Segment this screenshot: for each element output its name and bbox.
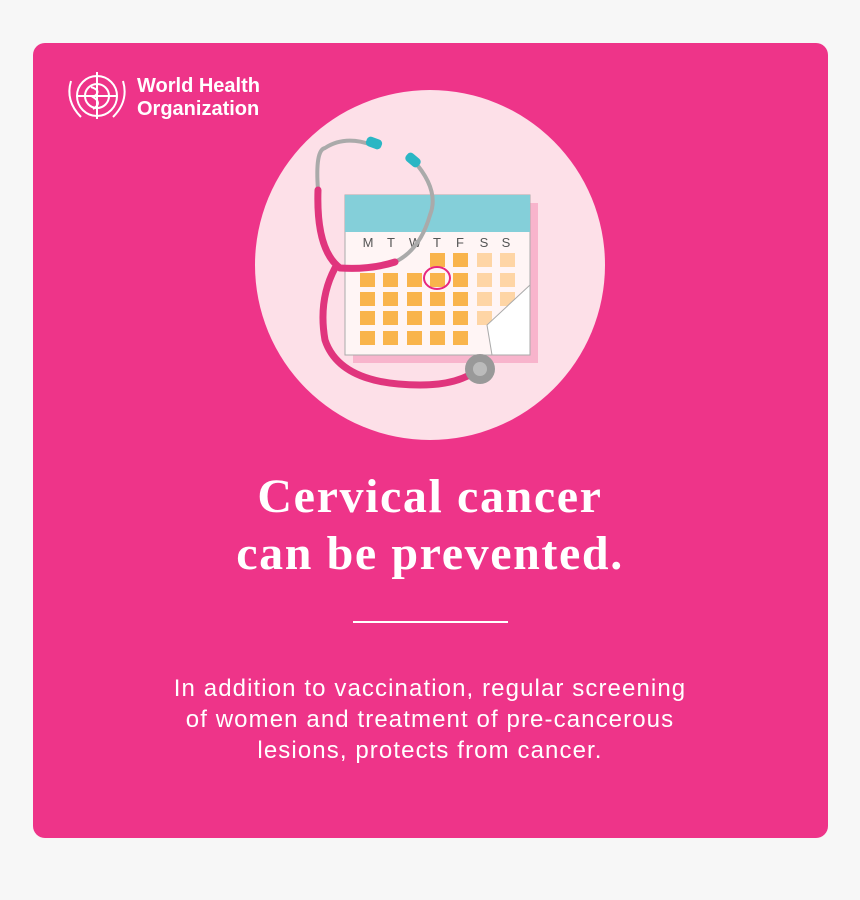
illustration: calendar with stethoscope: M (363, 235, 373, 250)
body text: In addition to vaccination, regular screening (174, 675, 686, 702)
illustration: calendar with stethoscope: T (387, 235, 395, 250)
body text: of women and treatment of pre-cancerous (186, 706, 674, 733)
logo: WHO: World Health (137, 75, 260, 97)
illustration: calendar with stethoscope: T (433, 235, 441, 250)
title: can be prevented. (236, 527, 624, 580)
body text: lesions, protects from cancer. (257, 737, 603, 764)
logo: WHO (68, 72, 260, 120)
illustration: calendar with stethoscope: F (456, 235, 464, 250)
illustration: calendar with stethoscope (255, 90, 605, 440)
illustration: calendar with stethoscope: S (502, 235, 511, 250)
divider (353, 621, 508, 623)
title (236, 470, 624, 580)
title: Cervical cancer (257, 470, 603, 523)
logo: WHO: Organization (137, 98, 259, 120)
illustration: calendar with stethoscope: S (480, 235, 489, 250)
illustration: calendar with stethoscope: W (409, 235, 422, 250)
body text (174, 675, 686, 764)
